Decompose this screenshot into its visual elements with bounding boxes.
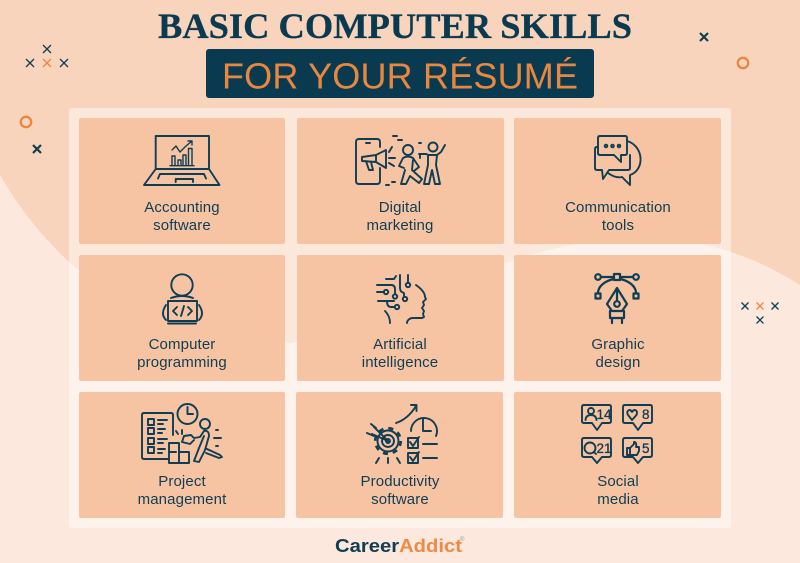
icon: laptop with chart — [144, 136, 220, 185]
card: project management: management — [138, 491, 227, 508]
icon: programmer behind laptop — [163, 274, 202, 324]
logo mark: ® — [460, 536, 465, 543]
icon: phone, megaphone and people — [356, 136, 445, 185]
card: accounting software: Accounting — [144, 199, 220, 216]
title: BASIC COMPUTER SKILLS — [158, 6, 632, 46]
card: computer programming: Computer — [149, 336, 215, 353]
card: social media — [514, 392, 721, 518]
card: accounting software — [79, 118, 285, 244]
card: project management — [79, 392, 285, 518]
icon: checklist, clock, puzzle and person — [142, 404, 222, 463]
card: graphic design: Graphic — [591, 336, 645, 353]
icon: speech bubbles — [595, 136, 641, 185]
card: accounting software: software — [153, 217, 211, 234]
decoration: left ring and cross — [21, 117, 41, 153]
card: productivity software — [296, 392, 503, 518]
card: communication tools: tools — [602, 217, 634, 234]
card: graphic design: design — [596, 354, 640, 371]
card: productivity software: Productivity — [361, 473, 440, 490]
card: computer programming: programming — [137, 354, 227, 371]
card: digital marketing: marketing — [367, 217, 433, 234]
icon: AI head with circuits — [377, 275, 426, 323]
panel: skills grid — [69, 108, 731, 528]
card: artificial intelligence: intelligence — [362, 354, 438, 371]
decoration: top-left crosses — [26, 45, 68, 67]
icon: social notification bubbles: 8 — [642, 407, 650, 422]
card: computer programming — [79, 255, 285, 381]
card: artificial intelligence — [297, 255, 504, 381]
icon: social notification bubbles: 14 — [596, 407, 612, 422]
subtitle banner: FOR YOUR RÉSUMÉ — [222, 56, 578, 96]
card: social media: Social — [597, 473, 639, 490]
card: communication tools: Communication — [565, 199, 671, 216]
card: social media: media — [597, 491, 639, 508]
card: digital marketing: Digital — [379, 199, 421, 216]
card: graphic design — [514, 255, 721, 381]
icon: social notification bubbles: 5 — [642, 441, 650, 456]
card: digital marketing — [297, 118, 504, 244]
icon: gear, target, clock and checklist — [367, 405, 437, 463]
card: communication tools — [514, 118, 721, 244]
decoration: top-right cross and ring — [700, 33, 748, 68]
icon: social notification bubbles: 21 — [596, 441, 612, 456]
card: artificial intelligence: Artificial — [373, 336, 427, 353]
card: productivity software: software — [371, 491, 429, 508]
logo: CareerAddict: Career Addict — [335, 536, 462, 556]
icon: social notification bubbles — [582, 405, 652, 463]
decoration: right crosses — [742, 302, 778, 324]
icon: vector pen tool — [595, 274, 639, 323]
card: project management: Project — [158, 473, 206, 490]
